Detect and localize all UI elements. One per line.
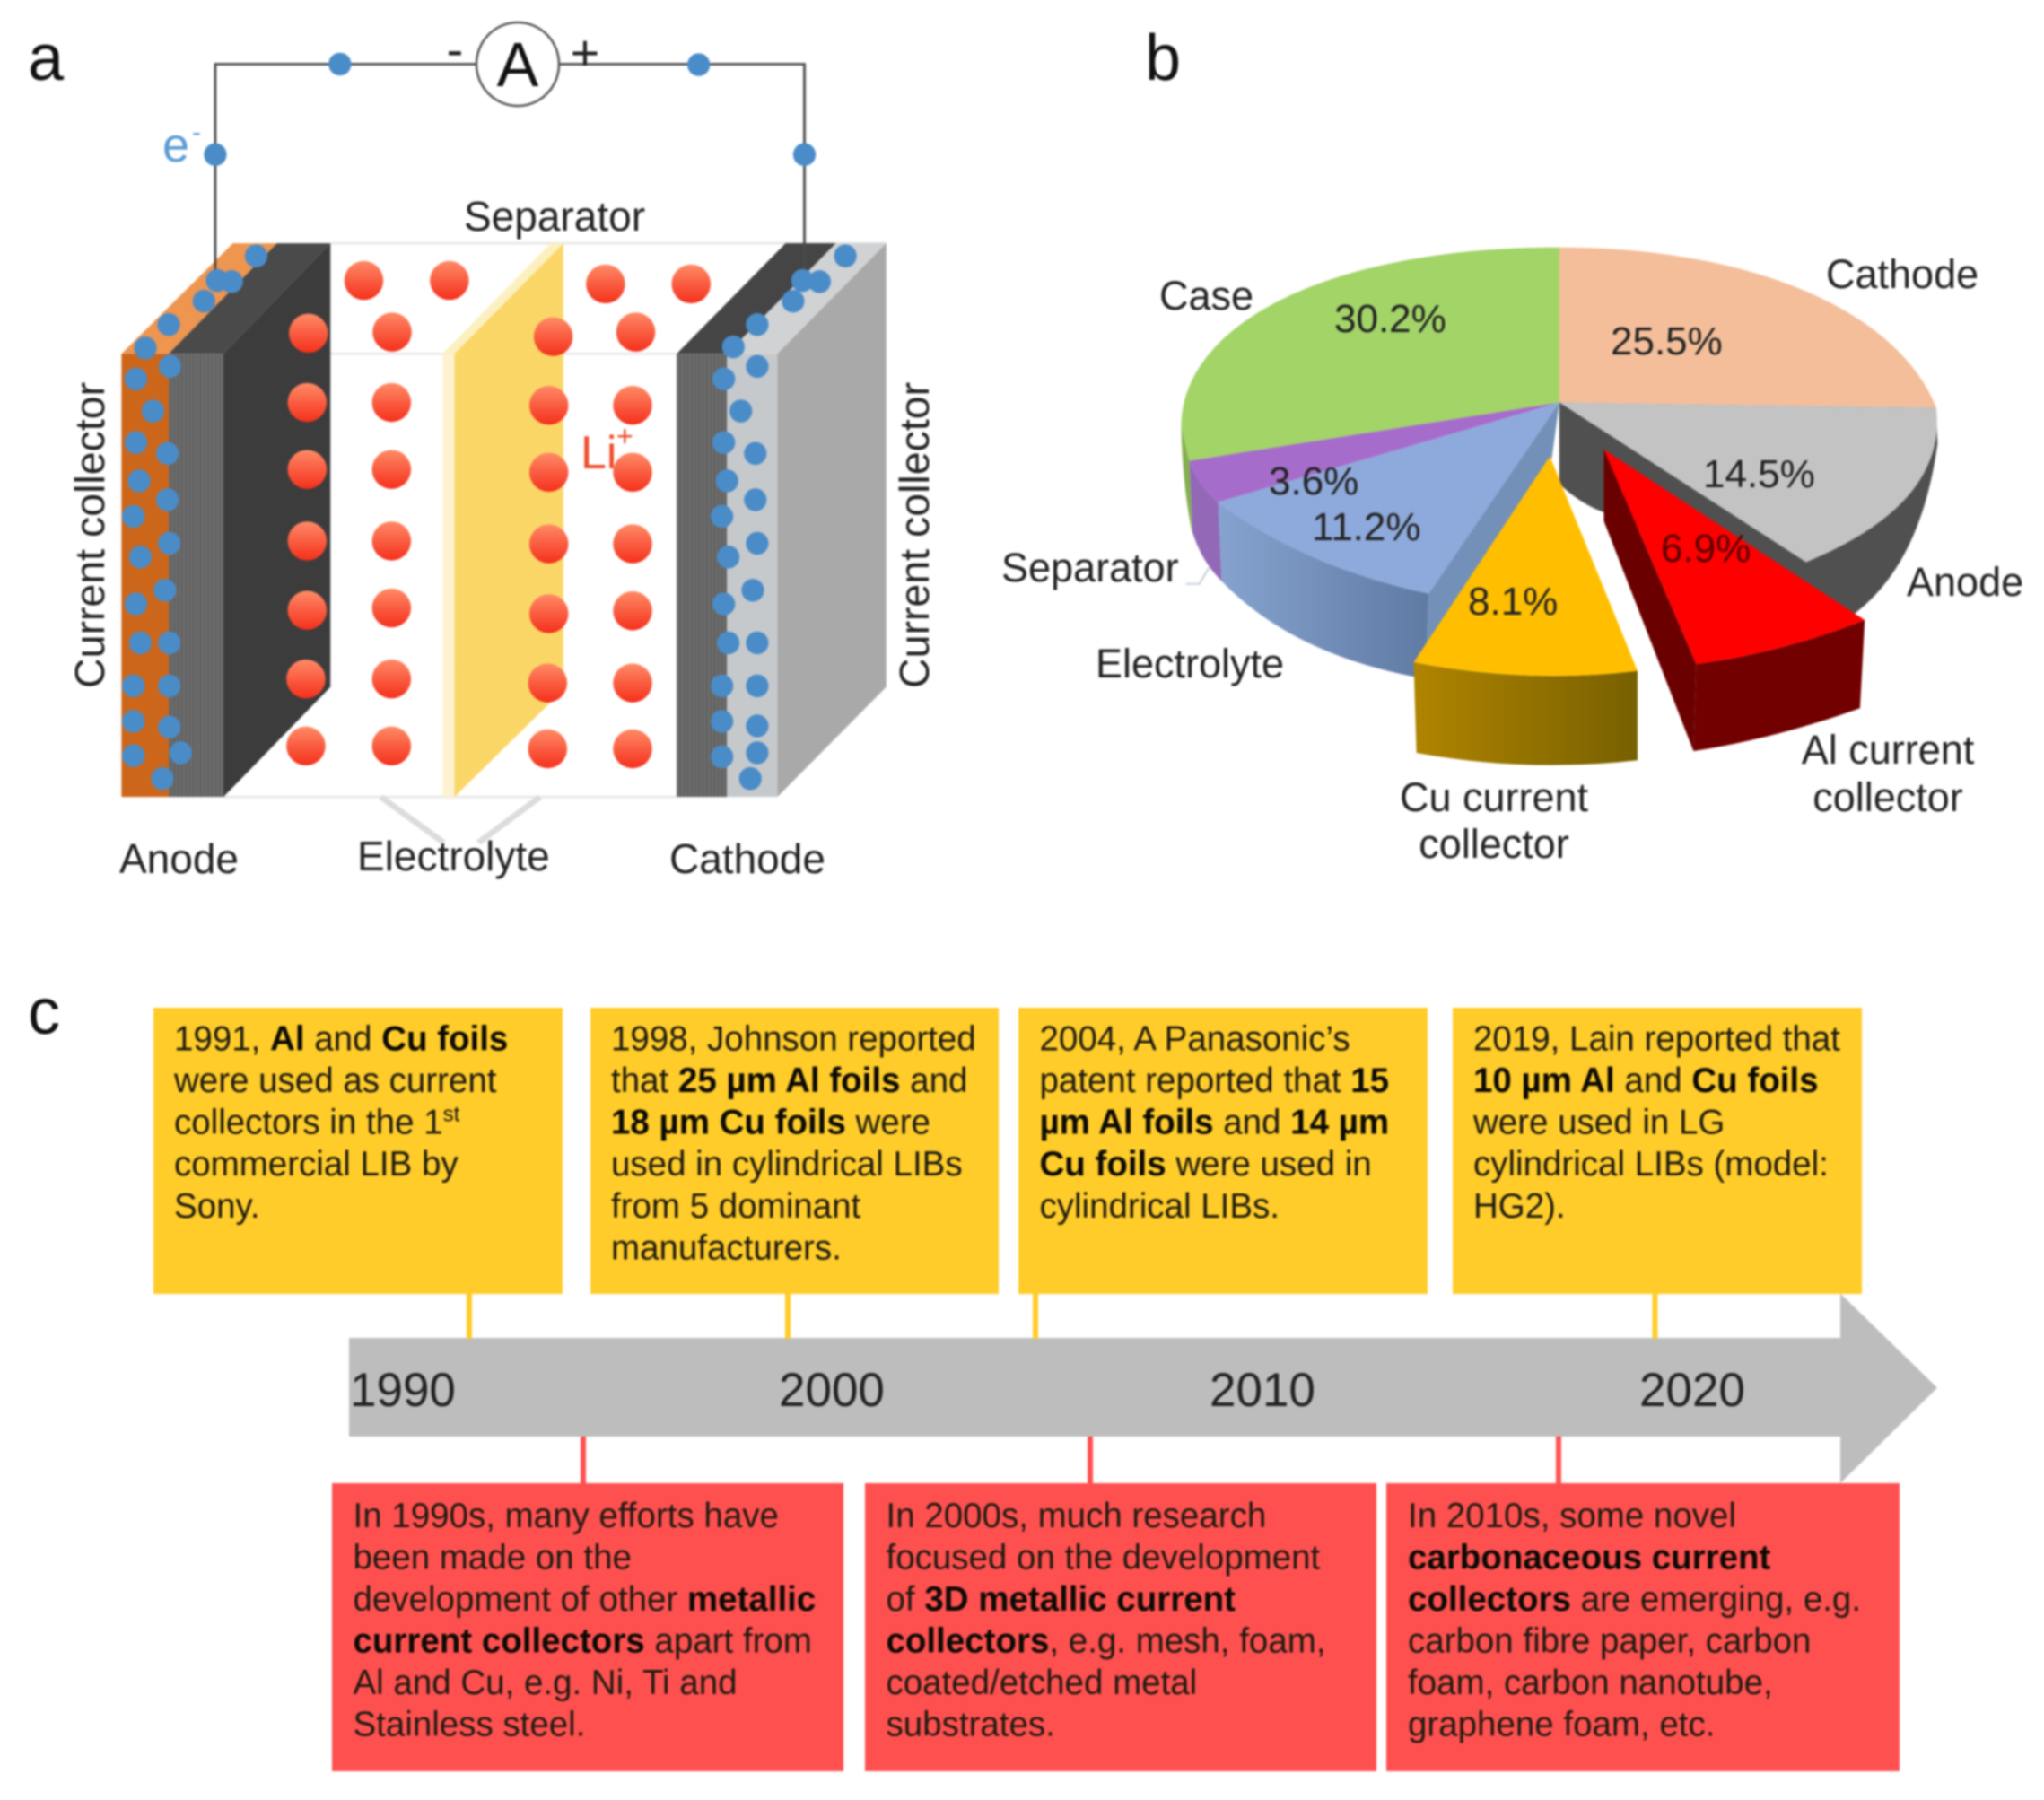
event box 1990s: In 1990s, many efforts have: [354, 1497, 779, 1535]
Al current collector exploded wedge walls: [1603, 450, 1865, 751]
year 1990: 1990: [350, 1364, 456, 1417]
event box 2000s: of 3D metallic current: [887, 1580, 1236, 1619]
event box 2000s: focused on the development: [887, 1538, 1321, 1577]
event box 2010s: collectors are emerging, e.g.: [1408, 1580, 1861, 1619]
separator sheet: [442, 243, 563, 797]
event box 1990s: Stainless steel.: [354, 1705, 585, 1744]
label Cu current collector: Cu current: [1400, 774, 1589, 820]
event box 1990s: been made on the: [354, 1538, 632, 1577]
value cathode: 25.5%: [1611, 319, 1723, 363]
event box 2019: [1453, 1008, 1862, 1294]
value Al current collector: 6.9%: [1661, 527, 1751, 571]
timeline arrow: [349, 1294, 1937, 1483]
event box 2019: 2019, Lain reported that: [1473, 1019, 1840, 1059]
label anode: Anode: [1907, 559, 2023, 605]
event box 2010s: carbon fibre paper, carbon: [1408, 1622, 1811, 1660]
event box 2004: cylindrical LIBs.: [1039, 1187, 1280, 1226]
label left current collector: Current collector: [66, 382, 113, 688]
label cathode: Cathode: [1826, 251, 1978, 297]
event box 1990s: [332, 1483, 843, 1771]
event box 1998: 1998, Johnson reported: [611, 1019, 976, 1059]
panel label c: c: [28, 976, 60, 1048]
label Al current collector: [1802, 727, 1975, 820]
label Al current collector: Al current: [1802, 727, 1975, 773]
event box 2019: HG2).: [1473, 1187, 1566, 1226]
event box 2004: patent reported that 15: [1039, 1062, 1389, 1100]
value electrolyte: 11.2%: [1312, 505, 1421, 549]
event box 1990s: development of other metallic: [354, 1580, 816, 1619]
panel label a: a: [28, 22, 65, 94]
event box 2010s: carbonaceous current: [1408, 1538, 1771, 1577]
event box 2019: cylindrical LIBs (model:: [1473, 1145, 1829, 1184]
panel b: 3D pie chart: [1001, 248, 2023, 867]
event box 1991: commercial LIB by: [174, 1145, 459, 1184]
cell body drawing: [121, 53, 887, 843]
electrons on anode: [122, 244, 267, 790]
event box 2019: 10 µm Al and Cu foils: [1473, 1062, 1819, 1100]
event box 2010s: graphene foam, etc.: [1408, 1705, 1715, 1744]
cathode active layer: [677, 243, 836, 797]
event box 2000s: collectors, e.g. mesh, foam,: [887, 1622, 1326, 1660]
panel c: timeline: [153, 1008, 1937, 1771]
label cathode: Cathode: [669, 835, 825, 882]
electrons on cathode: [711, 244, 857, 790]
event box 1990s: Al and Cu, e.g. Ni, Ti and: [354, 1664, 738, 1702]
event box 2010s: In 2010s, some novel: [1408, 1497, 1736, 1535]
lithium ions: [286, 261, 711, 768]
year 2020: 2020: [1639, 1364, 1745, 1417]
electrolyte pointer arrows: [380, 797, 540, 843]
electron label: -: [192, 118, 201, 147]
event box 2004: µm Al foils and 14 µm: [1039, 1104, 1389, 1142]
electrolyte inner wall: [1427, 403, 1559, 647]
event box 1998: 18 µm Cu foils were: [611, 1104, 930, 1142]
external circuit wire: [215, 64, 805, 281]
event box 1998: [590, 1008, 999, 1294]
ammeter: A: [497, 30, 539, 100]
event box 2000s: [865, 1483, 1376, 1771]
event box 2000s: In 2000s, much research: [887, 1497, 1266, 1535]
value anode: 14.5%: [1703, 452, 1815, 496]
label Cu current collector: collector: [1419, 821, 1569, 867]
electron label: [162, 118, 201, 172]
event box 2000s: coated/etched metal: [887, 1664, 1197, 1702]
label right current collector: Current collector: [891, 382, 938, 688]
event box 2004: [1018, 1008, 1428, 1294]
connectors to yellow boxes: [467, 1293, 1658, 1339]
case side wall: [1181, 426, 1192, 536]
event box 1991: 1991, Al and Cu foils: [174, 1019, 508, 1059]
event box 1998: that 25 µm Al foils and: [611, 1062, 967, 1100]
event box 1998: from 5 dominant: [611, 1187, 860, 1226]
event box 1990s: current collectors apart from: [354, 1622, 812, 1660]
label separator: Separator: [1001, 545, 1179, 590]
event box 2004: Cu foils were used in: [1039, 1145, 1372, 1184]
circuit electrons: [204, 53, 816, 166]
separator side wall: [1189, 461, 1221, 581]
event box 1991: [153, 1008, 563, 1294]
event box 2004: 2004, A Panasonic’s: [1039, 1019, 1350, 1059]
anode slice: [1559, 403, 1937, 563]
event box 2000s: substrates.: [887, 1705, 1055, 1744]
connectors to red boxes: [581, 1437, 1561, 1483]
event box 2010s: [1386, 1483, 1900, 1771]
panel a: battery cell schematic: [66, 21, 938, 882]
label case: Case: [1159, 273, 1253, 319]
year 2010: 2010: [1210, 1364, 1315, 1417]
event box 1991: were used as current: [173, 1062, 497, 1100]
Cu current collector exploded slice: [1414, 456, 1638, 676]
lithium ion label: +: [616, 420, 633, 452]
ammeter polarity plus: +: [571, 24, 599, 81]
anode active layer: [169, 243, 330, 797]
label Cu current collector: [1400, 774, 1589, 867]
cathode current collector: [727, 243, 887, 797]
event box 1991: collectors in the 1: [174, 1104, 443, 1142]
separator leader line: [1186, 567, 1210, 584]
value Cu current collector: 8.1%: [1468, 580, 1558, 624]
separator slice: [1189, 403, 1559, 502]
label electrolyte: Electrolyte: [1096, 641, 1284, 686]
value case: 30.2%: [1334, 297, 1446, 341]
label Al current collector: collector: [1813, 774, 1963, 820]
lithium ion label: Li: [581, 427, 616, 479]
case slice: [1181, 248, 1559, 461]
event box 1991: Sony.: [174, 1187, 260, 1226]
electron label: e: [162, 118, 189, 172]
label electrolyte: Electrolyte: [357, 833, 550, 879]
ammeter polarity minus: -: [447, 21, 463, 77]
electrolyte slice: [1219, 403, 1559, 594]
Cu current collector exploded wedge wall: [1414, 662, 1638, 765]
event box 1998: used in cylindrical LIBs: [611, 1145, 963, 1184]
year 2000: 2000: [779, 1364, 885, 1417]
anode current collector: [121, 243, 277, 797]
event box 2010s: foam, carbon nanotube,: [1408, 1664, 1773, 1702]
label anode: Anode: [119, 835, 239, 882]
anode side wall: [1559, 403, 1937, 617]
Al current collector exploded slice: [1603, 450, 1865, 664]
housing outline: [223, 243, 887, 797]
panel label b: b: [1145, 22, 1181, 94]
cathode slice: [1559, 248, 1936, 407]
electrolyte side wall: [1219, 502, 1428, 677]
value separator: 3.6%: [1269, 459, 1358, 503]
event box 1998: manufacturers.: [611, 1228, 842, 1267]
ammeter: [476, 22, 559, 106]
lithium ion label: [581, 420, 633, 479]
label separator: Separator: [464, 193, 645, 240]
event box 1991: st: [443, 1103, 460, 1127]
event box 2019: were used in LG: [1472, 1104, 1725, 1142]
